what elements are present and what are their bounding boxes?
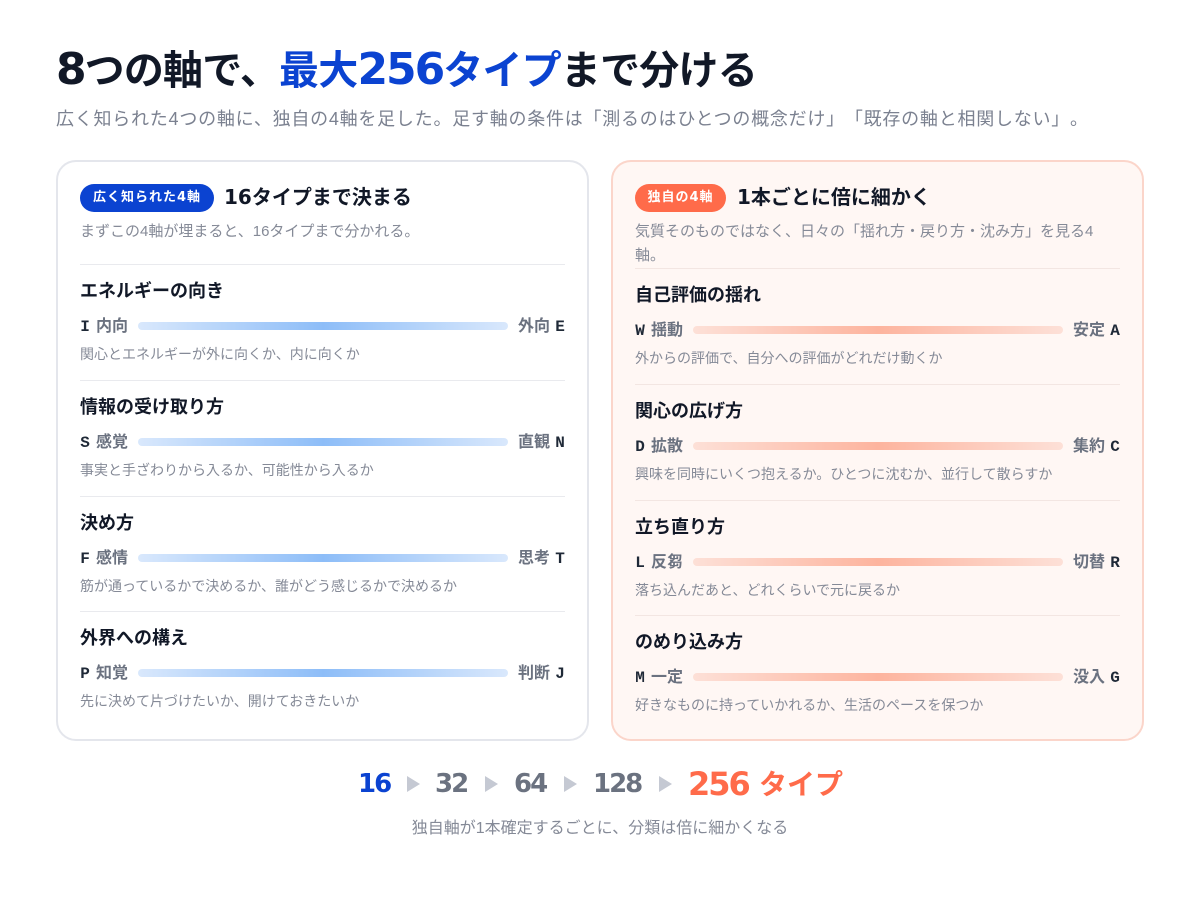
axis: energy direction: I xyxy=(80,318,90,336)
axis: deciding: 感情 xyxy=(96,550,128,567)
axis: deciding: 決め方 xyxy=(80,513,134,533)
axis: stance to outside world xyxy=(80,611,565,728)
axis: recovery: R xyxy=(1110,554,1120,572)
axis: recovery: 立ち直り方 xyxy=(635,517,725,537)
type count progression: 16 xyxy=(358,769,390,799)
axis: energy direction: エネルギーの向き xyxy=(80,281,224,301)
axis: spreading interest: 興味を同時にいくつ抱えるか。ひとつに沈むか、並行して散らすか xyxy=(635,466,1052,482)
axis: stance to outside world: 先に決めて片づけたいか、開けておきたいか xyxy=(80,693,359,709)
type count progression: 128 xyxy=(593,769,641,799)
axis: receiving information: N xyxy=(555,434,565,452)
type count progression: 64 xyxy=(514,769,546,799)
type count progression xyxy=(358,765,843,803)
axis: energy direction: 関心とエネルギーが外に向くか、内に向くか xyxy=(80,346,360,362)
axis: recovery: L xyxy=(635,554,645,572)
panel: original four axes xyxy=(611,160,1144,741)
axis: stance to outside world: P xyxy=(80,665,90,683)
axis: immersion: M xyxy=(635,669,645,687)
axis: stance to outside world: 外界への構え xyxy=(80,628,188,648)
axis: deciding: 筋が通っているかで決めるか、誰がどう感じるかで決めるか xyxy=(80,578,457,594)
panel heading: 16タイプまで決まる xyxy=(224,185,412,209)
axis: spreading interest: D xyxy=(635,438,645,456)
axis: immersion: のめり込み方 xyxy=(635,632,743,652)
badge: widely known: 広く知られた4軸 xyxy=(93,190,201,205)
axis: stance to outside world: 知覚 xyxy=(96,665,128,682)
axis: energy direction: 外向 xyxy=(518,318,550,335)
axis: immersion: 没入 xyxy=(1073,669,1105,686)
type count progression: 32 xyxy=(435,769,467,799)
axis: self-evaluation swing: W xyxy=(635,322,645,340)
title: 8つの軸で、最大256タイプまで分ける xyxy=(56,44,757,95)
axis: immersion xyxy=(635,615,1120,732)
axis: spreading interest xyxy=(635,384,1120,501)
axis: recovery xyxy=(635,500,1120,617)
axis: immersion: 好きなものに持っていかれるか、生活のペースを保つか xyxy=(635,697,983,713)
axis: self-evaluation swing: A xyxy=(1110,322,1120,340)
axis: deciding xyxy=(80,496,565,613)
axis: self-evaluation swing: 揺動 xyxy=(651,322,683,339)
axis: energy direction: E xyxy=(555,318,565,336)
axis: spreading interest: 関心の広げ方 xyxy=(635,401,743,421)
footnote: 独自軸が1本確定するごとに、分類は倍に細かくなる xyxy=(412,820,788,837)
type count progression: タイプ xyxy=(759,768,843,801)
axis: energy direction: 内向 xyxy=(96,318,128,335)
axis: self-evaluation swing: 自己評価の揺れ xyxy=(635,285,761,305)
axis: self-evaluation swing: 安定 xyxy=(1073,322,1105,339)
axis: stance to outside world: J xyxy=(555,665,565,683)
axis: stance to outside world: 判断 xyxy=(518,665,550,682)
type count progression: 256 xyxy=(688,765,749,803)
axis: receiving information: 情報の受け取り方 xyxy=(80,397,224,417)
axis: recovery: 落ち込んだあと、どれくらいで元に戻るか xyxy=(635,582,900,598)
badge: widely known xyxy=(80,184,214,212)
axis: immersion: 一定 xyxy=(651,669,683,686)
axis: spreading interest: 拡散 xyxy=(651,438,683,455)
axis: deciding: 思考 xyxy=(518,550,550,567)
panel: widely known four axes xyxy=(56,160,589,741)
axis: spreading interest: C xyxy=(1110,438,1120,456)
axis: receiving information: S xyxy=(80,434,90,452)
axis: deciding: F xyxy=(80,550,90,568)
panel heading: 1本ごとに倍に細かく xyxy=(737,185,931,209)
subtitle: 広く知られた4つの軸に、独自の4軸を足した。足す軸の条件は「測るのはひとつの概念だけ」「既存の軸と相関しない」。 xyxy=(56,109,1089,129)
axis: recovery: 反芻 xyxy=(651,554,683,571)
axis: receiving information: 感覚 xyxy=(96,434,128,451)
axis: receiving information: 直観 xyxy=(518,434,550,451)
axis: deciding: T xyxy=(555,550,565,568)
axis: recovery: 切替 xyxy=(1073,554,1105,571)
panel description: まずこの4軸が埋まると、16タイプまで分かれる。 xyxy=(80,223,419,240)
axis: self-evaluation swing: 外からの評価で、自分への評価がどれだけ動くか xyxy=(635,350,942,366)
axis: spreading interest: 集約 xyxy=(1073,438,1105,455)
badge: original: 独自の4軸 xyxy=(647,190,714,205)
badge: original xyxy=(635,184,726,212)
panel description: 気質そのものではなく、日々の「揺れ方・戻り方・沈み方」を見る4軸。 xyxy=(635,223,1093,264)
axis: energy direction xyxy=(80,264,565,381)
axis: self-evaluation swing xyxy=(635,268,1120,385)
axis: receiving information xyxy=(80,380,565,497)
axis: receiving information: 事実と手ざわりから入るか、可能性から入るか xyxy=(80,462,374,478)
axis: immersion: G xyxy=(1110,669,1120,687)
